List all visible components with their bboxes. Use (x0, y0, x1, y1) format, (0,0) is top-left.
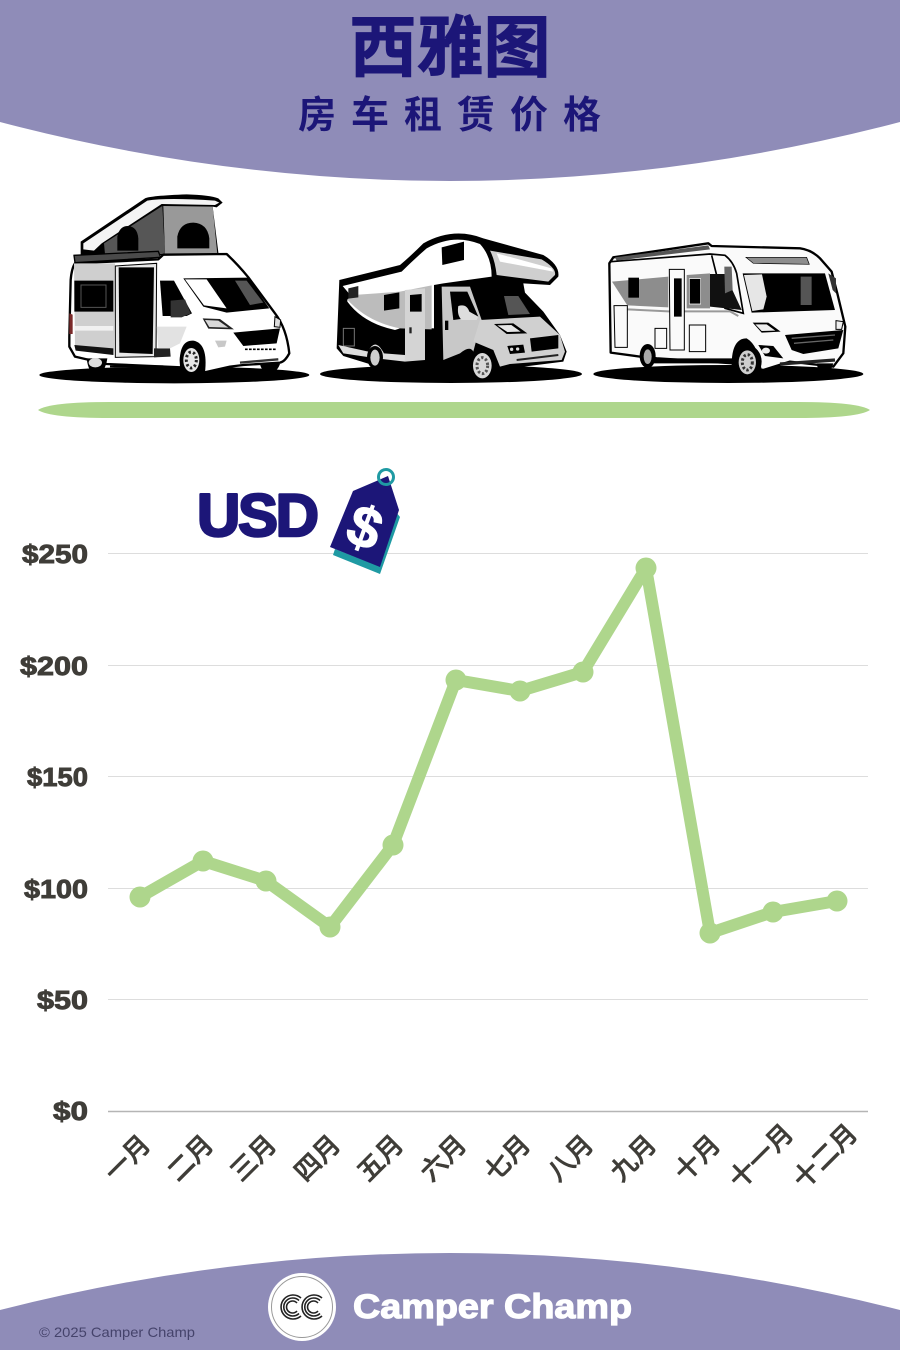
awning (74, 251, 161, 263)
y axis labels: $150 (27, 762, 88, 792)
data points (130, 558, 848, 944)
x axis (108, 1110, 868, 1112)
icon: Camper Champ logo (268, 1273, 336, 1341)
y axis labels: $0 (53, 1096, 88, 1126)
currency label: USD (197, 482, 319, 549)
x axis month labels: 三月 (224, 1129, 282, 1187)
header band (0, 0, 900, 181)
x axis month labels: 一月 (98, 1129, 156, 1187)
x axis month labels: 四月 (288, 1129, 346, 1187)
gridlines (108, 554, 868, 1000)
y axis labels: $100 (24, 874, 88, 904)
line chart (20, 539, 868, 1194)
x axis month labels: 十一月 (723, 1118, 799, 1194)
copyright: © 2025 Camper Champ (39, 1324, 195, 1340)
x axis month labels: 十二月 (787, 1118, 863, 1194)
x axis month labels (98, 1118, 863, 1194)
icon: price tag (330, 470, 400, 574)
x axis month labels: 六月 (414, 1129, 472, 1187)
icon: pop-top camper van (39, 194, 309, 383)
y axis labels (20, 539, 88, 1126)
x axis month labels: 八月 (541, 1129, 599, 1187)
icon: price tag: $ (338, 492, 391, 564)
x axis month labels: 五月 (351, 1129, 409, 1187)
x axis month labels: 十月 (668, 1129, 726, 1187)
data line (140, 568, 837, 933)
y axis labels: $250 (22, 539, 88, 569)
panel: camper illustrations (39, 194, 863, 383)
icon: integrated motorhome (593, 243, 863, 383)
x axis month labels: 二月 (161, 1129, 219, 1187)
footer band (0, 1253, 900, 1350)
subtitle: 房车租赁价格 (298, 95, 616, 137)
green divider bar (38, 402, 870, 418)
x axis month labels: 七月 (478, 1129, 536, 1187)
x axis month labels: 九月 (604, 1129, 662, 1187)
icon: motorhome with overcab (320, 234, 582, 383)
y axis labels: $50 (37, 985, 88, 1015)
title: 西雅图 (350, 11, 550, 86)
y axis labels: $200 (20, 651, 88, 681)
brand name: Camper Champ (353, 1288, 632, 1326)
